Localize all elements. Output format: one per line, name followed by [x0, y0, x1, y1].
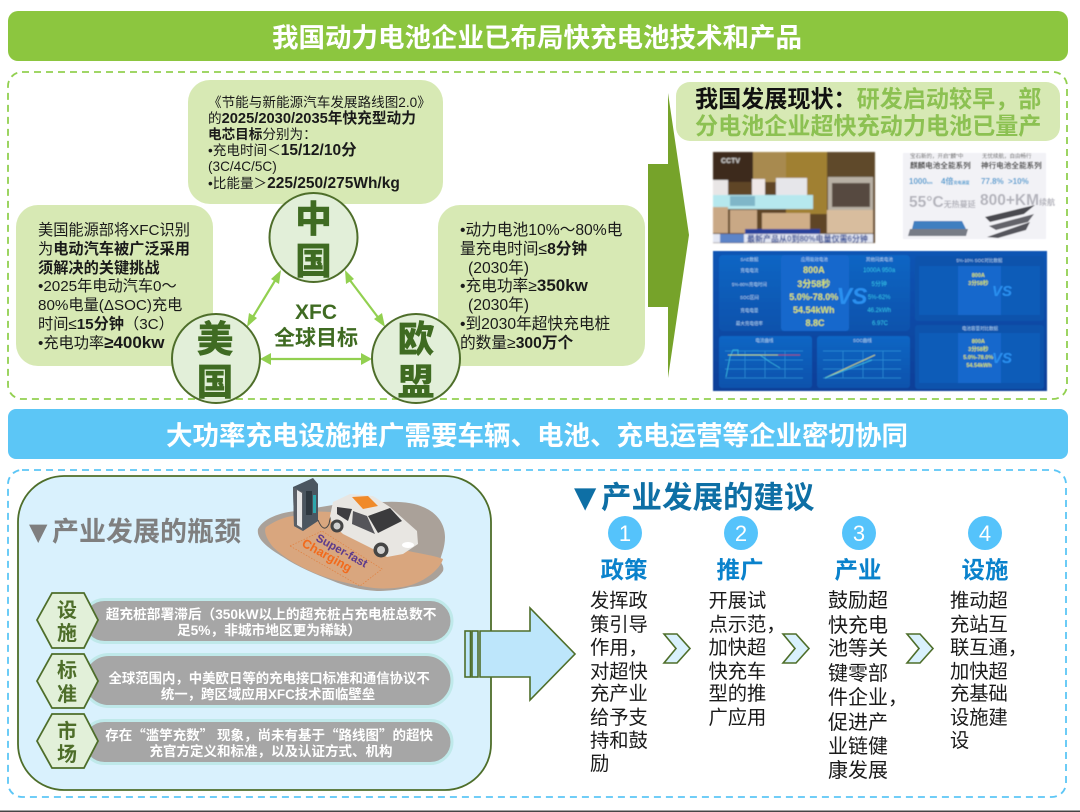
section banner [8, 409, 1068, 459]
recommendation 2: promotion: 开展试 [708, 590, 766, 612]
arrow: bottlenecks to recommendations [465, 608, 575, 700]
dashboard screenshot: 电池容量对比数据 [962, 325, 998, 332]
recommendation 4: facilities: 充基础 [950, 683, 1008, 705]
dashboard screenshot: 充电电流 [740, 267, 759, 274]
recommendation 1: policy [590, 516, 653, 775]
title banner: 我国动力电池企业已布局快充电池技术和产品 [272, 23, 802, 53]
dashboard screenshot: 应用能效电池 [801, 256, 828, 263]
photo: battery product series: 1000km [909, 177, 933, 186]
recommendation 3: industry [828, 516, 914, 782]
circle: China: 国 [295, 241, 332, 282]
bottleneck text: standards: 全球范围内，中美欧日等的充电接口标准和通信协议不 [108, 670, 430, 686]
dashboard screenshot: 54.54kWh [793, 305, 835, 315]
recommendation 4: facilities: 加快超 [950, 661, 1008, 683]
hexagon: standards: 准 [57, 683, 77, 706]
dashboard screenshot: 5%-10% SOC对比数据 [956, 257, 1003, 264]
heading: bottlenecks: 产业发展的瓶颈 [52, 517, 241, 547]
recommendation 4: facilities: 联互通， [950, 637, 1027, 659]
recommendation 4: facilities: 充站互 [950, 614, 1008, 636]
EU target box: 量充电时间≤8分钟 [460, 241, 587, 258]
section banner: 大功率充电设施推广需要车辆、电池、充电运营等企业密切协同 [166, 421, 908, 451]
bottleneck text: infrastructure: 超充桩部署滞后（350kW以上的超充桩占充电桩总数不 [106, 606, 437, 622]
EU target box: •充电功率≥350kw [460, 276, 588, 295]
photo: exhibition booth: 最新产品从0到80%电量仅需6分钟 [747, 234, 868, 244]
dashboard screenshot: 电流曲线 [755, 337, 774, 344]
recommendation 1: policy: 励 [590, 753, 609, 775]
recommendation 2: promotion: 快充车 [708, 661, 766, 683]
China target box: 《节能与新能源汽车发展路线图2.0》 [208, 94, 431, 110]
center label: XFC global target: XFC [295, 301, 337, 324]
photo: battery product series: 宝石新的，开启"麟"中 [910, 152, 963, 160]
dashboard screenshot: 6.97C [872, 321, 889, 327]
circle: USA: 美 [196, 319, 234, 360]
hexagon: standards: 标 [57, 659, 77, 682]
photo: battery product series: 神行电池全能系列 [981, 160, 1042, 170]
recommendation 4: facilities: 设施建 [950, 707, 1008, 729]
illustration: super-fast charging car [258, 478, 445, 591]
hexagon: market: 场 [57, 743, 77, 766]
illustration: super-fast charging car: Charging [300, 536, 354, 575]
hexagon: market [37, 714, 98, 768]
photo: battery product series: 55°C无热蔓延 [909, 194, 976, 211]
bottleneck text: market: 充官方定义和标准，以及认证方式、机构 [150, 743, 392, 759]
recommendation 3: industry: 产业 [834, 557, 882, 583]
dashboard screenshot: 最大充电倍率 [736, 320, 763, 327]
dashboard screenshot: 3分58秒 [968, 279, 989, 287]
illustration: super-fast charging car: Super-fast [314, 532, 369, 570]
center label: XFC global target: 全球目标 [274, 326, 358, 350]
hexagon: standards [37, 654, 98, 708]
status heading: 研发启动较早，部 [857, 86, 1041, 112]
USA target box: 美国能源部将XFC识别 [38, 222, 190, 239]
recommendation 1: policy: 作用， [590, 637, 648, 659]
China target box [188, 80, 443, 204]
dashboard screenshot: 5%-62% [868, 295, 891, 301]
dashboard screenshot: 充电电量 [740, 307, 759, 314]
photo: battery product series: >10% [1008, 177, 1029, 186]
EU target box: (2030年) [468, 296, 529, 314]
USA target box: 80%电量(ΔSOC)充电 [38, 297, 182, 314]
recommendation 4: facilities: 4 [979, 521, 991, 546]
photo: exhibition booth [713, 152, 875, 244]
panel: industry section [8, 470, 1066, 797]
recommendation 1: policy: 对超快 [590, 661, 648, 683]
dashboard screenshot: VS [992, 283, 1012, 300]
dashboard screenshot: 5.0%-78.0% [789, 292, 838, 302]
photo: battery product series: 77.8% [981, 177, 1004, 186]
circle: China [270, 193, 358, 282]
dashboard screenshot: SAE数据 [740, 256, 759, 263]
dashboard screenshot: 3分58秒 [797, 278, 830, 289]
hexagon: infrastructure: 施 [57, 622, 77, 645]
recommendation 3: industry: 3 [853, 521, 865, 546]
bottleneck text: infrastructure: 足5%，非城市地区更为稀缺） [177, 622, 361, 638]
recommendation 2: promotion: 2 [735, 521, 747, 546]
USA target box [16, 205, 213, 366]
recommendation 3: industry: 康发展 [828, 759, 888, 782]
triangle arrows between regions [247, 270, 385, 365]
USA target box: 时间≤15分钟（3C） [38, 316, 174, 333]
recommendation 3: industry: 促进产 [828, 711, 888, 734]
dashboard screenshot: 54.54kWh [966, 363, 992, 369]
dashboard screenshot: 46.2kWh [867, 308, 891, 314]
chevron 1 [664, 634, 690, 663]
China target box: •充电时间＜15/12/10分 [208, 142, 357, 159]
China target box: (3C/4C/5C) [208, 159, 277, 174]
recommendation 3: industry: 业链健 [828, 735, 888, 758]
dashboard screenshot: 3分58秒 [968, 345, 989, 353]
USA target box: 为电动汽车被广泛采用 [38, 241, 190, 258]
panel: bottlenecks [18, 476, 491, 790]
recommendation 4: facilities: 设 [950, 730, 969, 752]
recommendation 1: policy: 政策 [600, 557, 648, 583]
circle: China: 中 [295, 199, 332, 240]
bottleneck text: standards: 统一，跨区域应用XFC技术面临壁垒 [161, 686, 375, 702]
dashboard screenshot [713, 251, 1047, 391]
circle: EU [372, 314, 460, 403]
circle: USA [172, 314, 260, 403]
China target box: 的2025/2030/2035年快充型动力 [208, 111, 416, 127]
recommendation 4: facilities: 推动超 [950, 590, 1008, 612]
EU target box: •动力电池10%～80%电 [460, 221, 623, 239]
recommendation 3: industry: 池等关 [828, 637, 888, 660]
recommendation 2: promotion: 型的推 [708, 683, 766, 705]
photo: battery product series: 无忧续航，自由畅行 [982, 152, 1032, 160]
EU target box: (2030年) [468, 259, 529, 277]
chevron 3 [907, 634, 933, 663]
recommendation 3: industry: 快充电 [828, 614, 888, 637]
recommendation 3: industry: 鼓励超 [828, 589, 888, 612]
recommendation 3: industry: 件企业， [828, 686, 908, 709]
USA target box: •充电功率≥400kw [38, 333, 164, 352]
recommendation 1: policy: 发挥政 [590, 590, 648, 612]
dashboard screenshot: 800A [972, 339, 985, 345]
recommendation 2: promotion: 点示范， [708, 614, 786, 636]
photo: battery product series: 麒麟电池全能系列 [910, 160, 971, 170]
dashboard screenshot: 其他同类电池 [866, 256, 893, 263]
dashboard screenshot: 800A [803, 265, 825, 275]
recommendation 2: promotion: 推广 [716, 557, 764, 583]
chevron 2 [783, 634, 809, 663]
recommendation 1: policy: 给予支 [590, 707, 648, 729]
bottleneck text: market: 存在“滥竽充数” 现象，尚未有基于“路线图”的超快 [105, 724, 433, 744]
dashboard screenshot: 800A [972, 273, 985, 279]
recommendation 2: promotion [708, 516, 791, 729]
EU target box: 的数量≥300万个 [460, 335, 573, 352]
photo: battery product series: 800+KM续航 [980, 192, 1055, 209]
arrow: to China status [648, 93, 689, 378]
dashboard screenshot: 5分钟 [871, 280, 887, 288]
photo: battery product series: 4倍充电速度 [941, 176, 969, 186]
dashboard screenshot: VS [837, 283, 868, 309]
China target box: 电芯目标分别为： [208, 127, 317, 142]
dashboard screenshot: SOC区间 [740, 294, 759, 301]
dashboard screenshot: 1000A 950a [863, 268, 896, 274]
hexagon: infrastructure: 设 [57, 599, 77, 622]
dashboard screenshot: 5%-80%充电时间 [732, 281, 767, 288]
dashboard screenshot: SOC曲线 [853, 337, 872, 344]
hexagon: market: 市 [57, 719, 77, 743]
recommendation 1: policy: 1 [619, 521, 631, 546]
recommendation 2: promotion: 广应用 [708, 707, 766, 729]
title banner [8, 11, 1068, 61]
dashboard screenshot: VS [992, 350, 1012, 367]
circle: USA: 国 [196, 362, 234, 403]
recommendation 1: policy: 充产业 [590, 683, 648, 705]
recommendation 1: policy: 策引导 [590, 614, 648, 636]
circle: EU: 盟 [398, 362, 434, 403]
dashboard screenshot: 5.0%-78.0% [963, 355, 993, 361]
USA target box: 须解决的关键挑战 [38, 259, 160, 277]
recommendation 2: promotion: 加快超 [708, 637, 766, 659]
China target box: •比能量＞225/250/275Wh/kg [208, 175, 400, 192]
photo: exhibition booth: CCTV [721, 158, 740, 165]
USA target box: •2025年电动汽车0～ [38, 278, 177, 295]
status heading: 我国发展现状： [695, 86, 857, 112]
panel: global XFC targets [8, 72, 1067, 403]
EU target box [438, 205, 645, 366]
EU target box: •到2030年超快充电桩 [460, 315, 610, 333]
heading: bottlenecks: ▼ [29, 518, 48, 546]
circle: EU: 欧 [398, 319, 434, 360]
center label: XFC global target [274, 301, 358, 350]
recommendation 4: facilities [950, 516, 1032, 752]
status heading [676, 82, 1060, 141]
photo: battery product series [903, 152, 1055, 239]
dashboard screenshot: 8.8C [805, 318, 825, 328]
recommendation 3: industry: 键零部 [828, 662, 888, 685]
recommendation 1: policy: 持和鼓 [590, 730, 648, 752]
bottleneck row: pills [83, 600, 452, 764]
heading: recommendations: 产业发展的建议 [601, 481, 815, 515]
status heading: 分电池企业超快充动力电池已量产 [695, 113, 1041, 139]
recommendation 4: facilities: 设施 [962, 557, 1008, 583]
hexagon: infrastructure [37, 593, 98, 648]
heading: recommendations: ▼ [574, 480, 597, 514]
